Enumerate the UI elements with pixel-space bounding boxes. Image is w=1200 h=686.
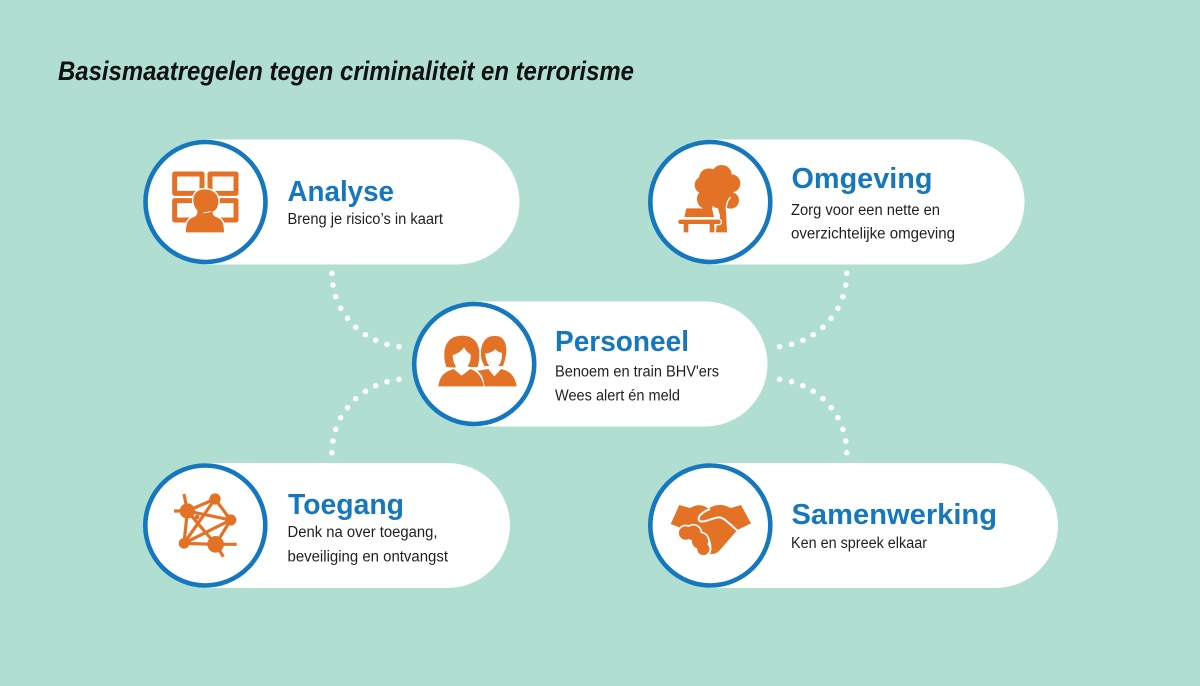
description line 2: overzichtelijke omgeving xyxy=(791,226,955,242)
panel: Toegang xyxy=(145,463,510,588)
man xyxy=(477,336,517,386)
description: Ken en spreek elkaar xyxy=(791,535,927,552)
dotted connector: Toegang to Personeel xyxy=(329,376,402,456)
description: Benoem en train BHV'ers xyxy=(555,364,719,381)
heading: Personeel xyxy=(555,326,689,358)
icon: handshake xyxy=(671,505,751,555)
heading: Samenwerking xyxy=(792,499,997,531)
icon: operator with screens xyxy=(175,174,236,232)
description: Zorg voor een nette en xyxy=(791,202,940,219)
dotted connector: Omgeving to Personeel xyxy=(777,270,850,350)
woman xyxy=(438,336,484,386)
panel: Omgeving xyxy=(650,140,1025,264)
icon: two people xyxy=(438,336,517,386)
dotted connector: Analyse to Personeel xyxy=(329,270,402,350)
heading: Toegang xyxy=(288,489,404,521)
bench seat xyxy=(678,220,721,232)
icon: network xyxy=(174,493,237,557)
description line 2: beveiliging en ontvangst xyxy=(288,548,449,566)
heading: Omgeving xyxy=(792,163,932,195)
panel: Samenwerking xyxy=(650,463,1058,588)
heading: Analyse xyxy=(288,176,394,208)
description: Denk na over toegang, xyxy=(288,524,438,541)
dotted connector: Samenwerking to Personeel xyxy=(777,376,850,456)
panel: Personeel xyxy=(414,302,768,426)
panel: Analyse xyxy=(146,140,520,264)
icon: tree and bench xyxy=(678,165,740,232)
description line 2: Wees alert én meld xyxy=(555,388,680,405)
title: Basismaatregelen tegen criminaliteit en terrorisme xyxy=(58,56,634,86)
description: Breng je risico’s in kaart xyxy=(288,211,444,228)
